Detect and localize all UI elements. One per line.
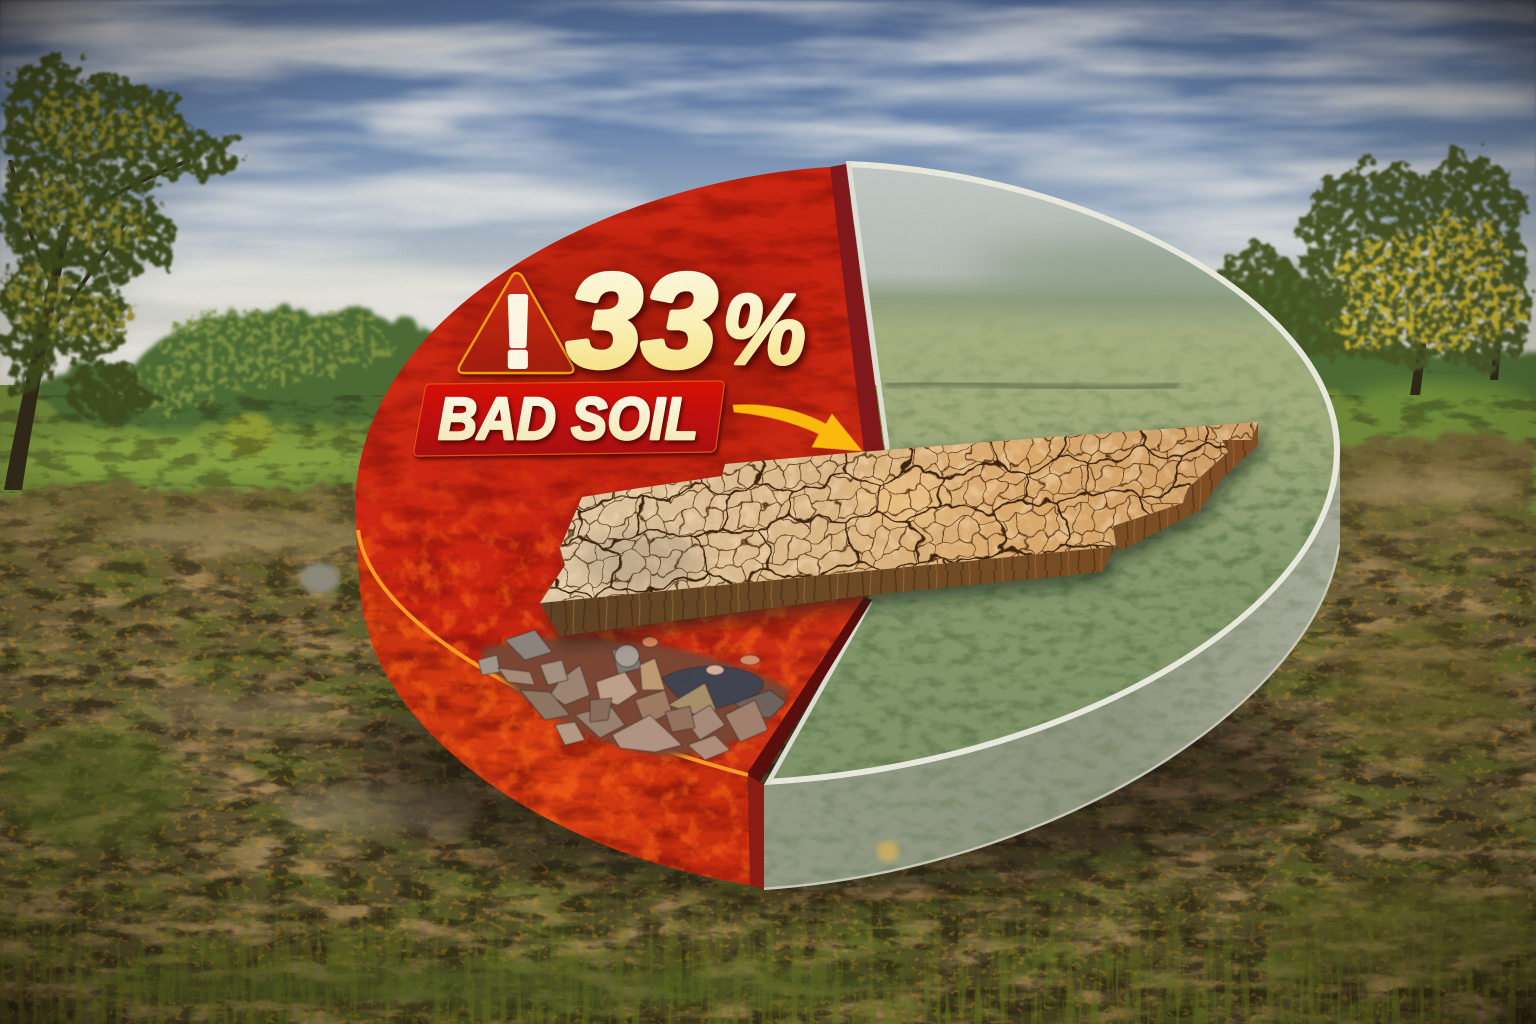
warning icon: ! [501, 276, 535, 388]
slab top face [530, 415, 1270, 615]
pie shadow [350, 650, 1310, 890]
headline: 33%: % [722, 274, 806, 386]
dry cracked Tennessee soil slab [530, 415, 1270, 636]
arrow pointing to the soil slab [733, 405, 862, 451]
left tree [0, 57, 241, 490]
pie slice: red side wall [356, 519, 750, 885]
pie slice: red top face [355, 167, 884, 773]
slab side [540, 422, 1258, 636]
background: sky with clouds [0, 0, 1536, 430]
background: distant tree line and meadow [0, 264, 1536, 515]
warning icon [459, 273, 573, 388]
pie slice: glass side wall [760, 440, 1350, 900]
label: BAD SOIL: BAD SOIL [438, 386, 698, 452]
pie slice: glass top face [760, 150, 1350, 800]
bright rim of red slice [358, 530, 748, 775]
background: bare ground [0, 380, 1536, 1024]
pie slice divider walls [830, 164, 884, 452]
headline: 33%: 33 [567, 247, 717, 394]
pie chart: 33 percent red, 67 percent glass [345, 150, 1350, 900]
headline: 33% [567, 247, 806, 394]
rocks pile [478, 630, 790, 760]
right trees [1216, 155, 1530, 395]
